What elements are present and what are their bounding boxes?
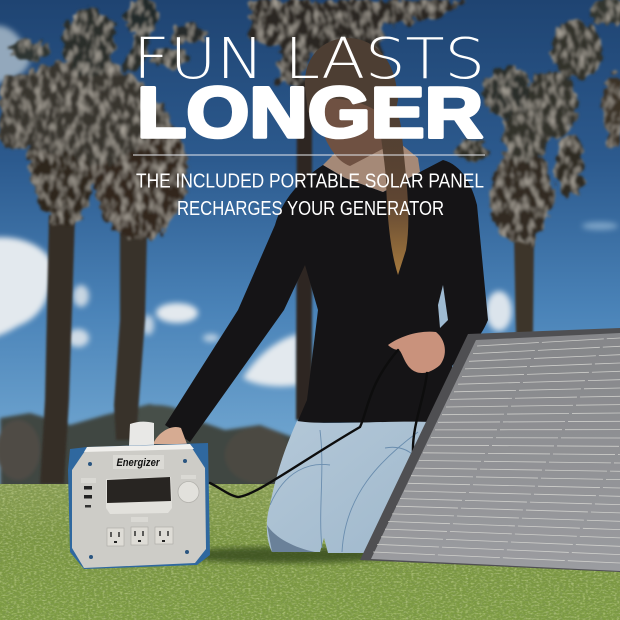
head hair [305,38,398,128]
jeans [267,421,432,553]
divider line [133,154,485,156]
corner screws [88,459,189,559]
heading: longer: LONGER [137,74,483,153]
panel frame [360,328,620,572]
jeans seams [270,430,418,552]
AC outlets [107,517,173,546]
grass lawn [0,484,620,620]
palm trees [0,0,620,484]
handle [129,422,154,446]
neck and chest skin [323,140,420,192]
generator blue casing [68,443,210,569]
knee shadow [267,525,315,552]
subheading [136,170,484,220]
power dial [178,475,199,502]
face [316,99,396,166]
palm trunk: behind woman [296,80,312,420]
hand on cable [388,332,445,373]
clouds [0,25,618,386]
long hair [380,105,408,275]
palm crown: top right [590,0,620,150]
subheading line 1: THE INCLUDED PORTABLE SOLAR PANEL [136,170,484,192]
panel surface [371,333,620,571]
USB ports [81,478,96,508]
palm crown: right [456,20,603,244]
black sweater [165,160,488,442]
panel busbars [373,338,620,563]
sky gap beside torso [438,285,448,328]
display screen [106,477,172,514]
hand on generator [153,427,187,444]
subheading line 2: RECHARGES YOUR GENERATOR [177,198,444,220]
palm crown: top centre [250,0,465,88]
woman kneeling [153,38,488,553]
palm trunk: right [514,235,534,334]
power cable [210,350,427,497]
palm trunk: far left [40,215,75,484]
palm crown: left pair [0,0,206,240]
heading: fun lasts: FUN LASTS [133,27,485,92]
portable power generator [68,422,210,569]
solar panel [360,328,620,572]
palm trunk: second [114,232,147,440]
top white strip [84,444,194,452]
generator body [72,445,206,568]
Energizer logo plate: Energizer [116,457,160,469]
background tree line [0,404,300,488]
